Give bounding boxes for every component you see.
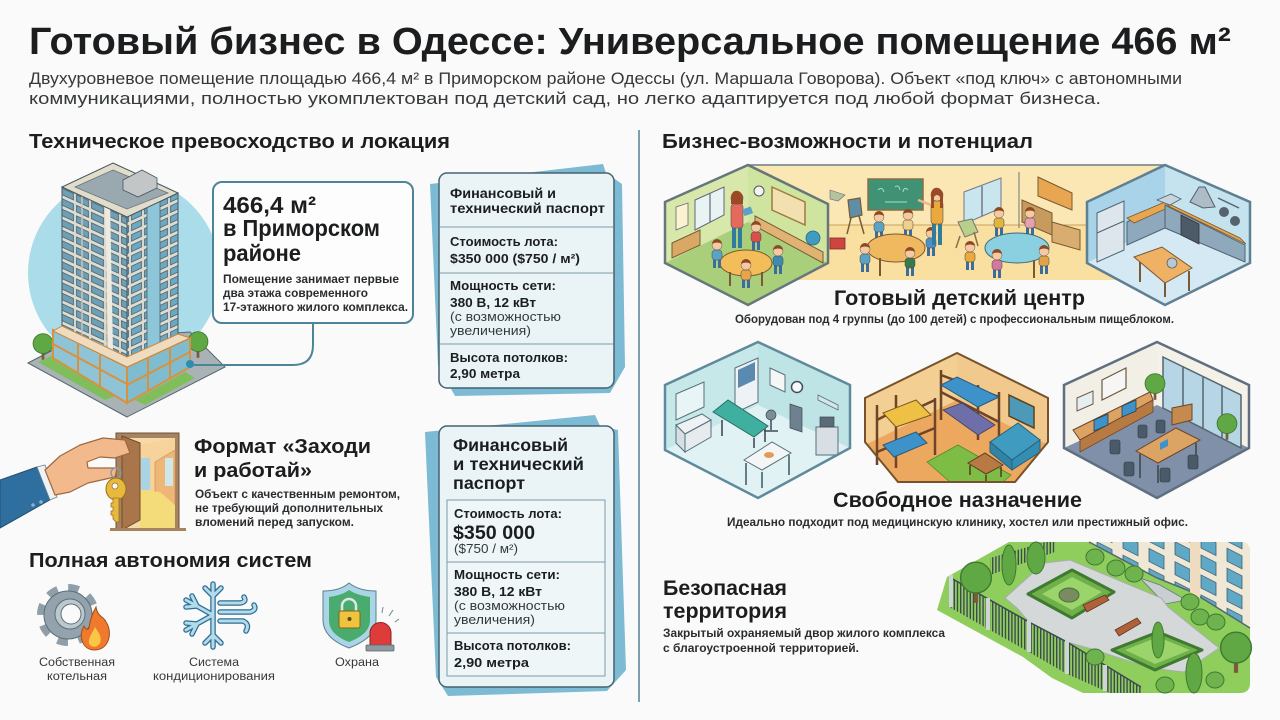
residential building: [1089, 542, 1250, 628]
panel: passport card 2: Высота потолков:: [454, 638, 571, 653]
intro text: коммуникациями, полностью укомплектован под детский сад, но легко адаптируется под любой формат бизнеса.: [29, 90, 1101, 108]
panel: passport card 2: Финансовый: [453, 435, 568, 455]
callout: area: Помещение занимает первые: [223, 274, 399, 286]
panel: passport card 1: Финансовый и: [450, 185, 556, 201]
teacher left: [731, 191, 753, 248]
panel: passport card 1: Мощность сети:: [450, 278, 556, 293]
icon: snowflake air conditioning: [186, 584, 255, 647]
icon: security shield: [323, 583, 399, 651]
connector line: [186, 323, 313, 368]
text: free purpose: Свободное назначение: [833, 489, 1082, 512]
callout: area: районе: [223, 240, 301, 266]
paving: [1005, 560, 1219, 672]
intro text: Двухуровневое помещение площадью 466,4 м² в Приморском районе Одессы (ул. Маршала Говорова). Объект «под ключ» с автономными: [29, 70, 1182, 88]
illustration: courtyard: [937, 542, 1251, 693]
panel: passport card 1: увеличения): [450, 323, 531, 338]
intro text: [29, 70, 1182, 108]
text: turnkey format: вломений перед запуском.: [195, 517, 354, 529]
panel: passport card 1: Стоимость лота:: [450, 234, 558, 249]
label: boiler: Собственная: [39, 657, 115, 669]
panel: passport card 1: (с возможностью: [450, 309, 561, 324]
podium: [53, 330, 127, 403]
ground plate: [28, 332, 225, 417]
illustration: kindergarten strip: [665, 165, 1250, 305]
benches: [1083, 595, 1109, 612]
heading: technical: Техническое превосходство и локация: [29, 131, 450, 153]
teacher: [918, 188, 943, 245]
kitchen room: [1087, 165, 1250, 305]
illustration: office room: [1064, 342, 1249, 498]
central group room: [748, 165, 1165, 280]
text: safe territory: с благоустроенной территорией.: [663, 641, 859, 655]
panel: passport card 1: [430, 164, 625, 396]
callout: area: [213, 182, 413, 323]
left bunk: [877, 395, 935, 468]
panel: passport card 1: $350 000 ($750 / м²): [450, 251, 580, 266]
panel: passport card 2: Стоимость лота:: [454, 506, 562, 521]
panel: passport card 2: 380 В, 12 кВт: [454, 584, 542, 599]
text: safe territory: [663, 577, 945, 655]
right bunk: [941, 370, 999, 442]
heading: business: Бизнес-возможности и потенциал: [662, 131, 1033, 153]
text: turnkey format: и работай»: [194, 459, 312, 482]
text: ready kindergarten: [735, 287, 1174, 326]
text: turnkey format: Объект с качественным ремонтом,: [195, 489, 400, 501]
tower: [62, 187, 127, 357]
label: air conditioning: кондиционирования: [153, 671, 275, 683]
text: turnkey format: Формат «Заходи: [194, 435, 371, 458]
heading: autonomy: Полная автономия систем: [29, 550, 312, 572]
text: safe territory: Безопасная: [663, 577, 787, 600]
trees and bushes: [961, 562, 991, 603]
panel: passport card 2: (с возможностью: [454, 598, 565, 613]
callout: area: два этажа современного: [223, 288, 368, 300]
panel: passport card 2: [425, 415, 626, 696]
text: ready kindergarten: Готовый детский центр: [834, 287, 1085, 310]
callout: area: в Приморском: [223, 215, 380, 241]
label: air conditioning: [153, 657, 275, 683]
label: air conditioning: Система: [189, 657, 240, 669]
callout: area: 466,4 м²: [223, 192, 316, 218]
text: safe territory: территория: [663, 600, 787, 623]
callout: area: 17-этажного жилого комплекса.: [223, 302, 408, 314]
panel: passport card 2: увеличения): [454, 612, 535, 627]
panel: passport card 2: 2,90 метра: [454, 655, 530, 670]
fence: [951, 578, 1029, 652]
label: boiler: [39, 657, 115, 683]
panel: passport card 2: паспорт: [453, 473, 525, 493]
text: ready kindergarten: Оборудован под 4 группы (до 100 детей) с профессиональным пищеблоком.: [735, 312, 1174, 326]
label: boiler: котельная: [47, 671, 107, 683]
text: turnkey format: [194, 435, 400, 529]
title: Готовый бизнес в Одессе: Универсальное помещение 466 м²: [29, 21, 1231, 63]
panel: passport card 2: $350 000: [453, 523, 535, 544]
roof: [62, 163, 178, 217]
panel: passport card 1: Высота потолков:: [450, 350, 568, 365]
text: turnkey format: не требующий дополнительных: [195, 503, 384, 515]
sofa: [990, 423, 1040, 470]
illustration: medical room: [665, 342, 850, 498]
panel: passport card 1: 380 В, 12 кВт: [450, 295, 536, 310]
panel: passport card 1: технический паспорт: [450, 200, 605, 216]
icon: boiler gear and flame: [41, 588, 109, 650]
panel: passport card 2: ($750 / м²): [454, 541, 518, 556]
panel: passport card 1: 2,90 метра: [450, 366, 521, 381]
text: safe territory: Закрытый охраняемый двор жилого комплекса: [663, 626, 945, 640]
panel: passport card 2: Мощность сети:: [454, 567, 560, 582]
building illustration: [28, 163, 225, 417]
illustration: hostel room: [865, 353, 1048, 482]
left room: [665, 165, 828, 305]
text: free purpose: [727, 489, 1188, 529]
panel: passport card 2: и технический: [453, 454, 584, 474]
text: free purpose: Идеально подходит под медицинскую клинику, хостел или престижный офис.: [727, 515, 1188, 529]
label: security: Охрана: [335, 657, 380, 669]
icon: hand with key and open door: [0, 433, 186, 531]
